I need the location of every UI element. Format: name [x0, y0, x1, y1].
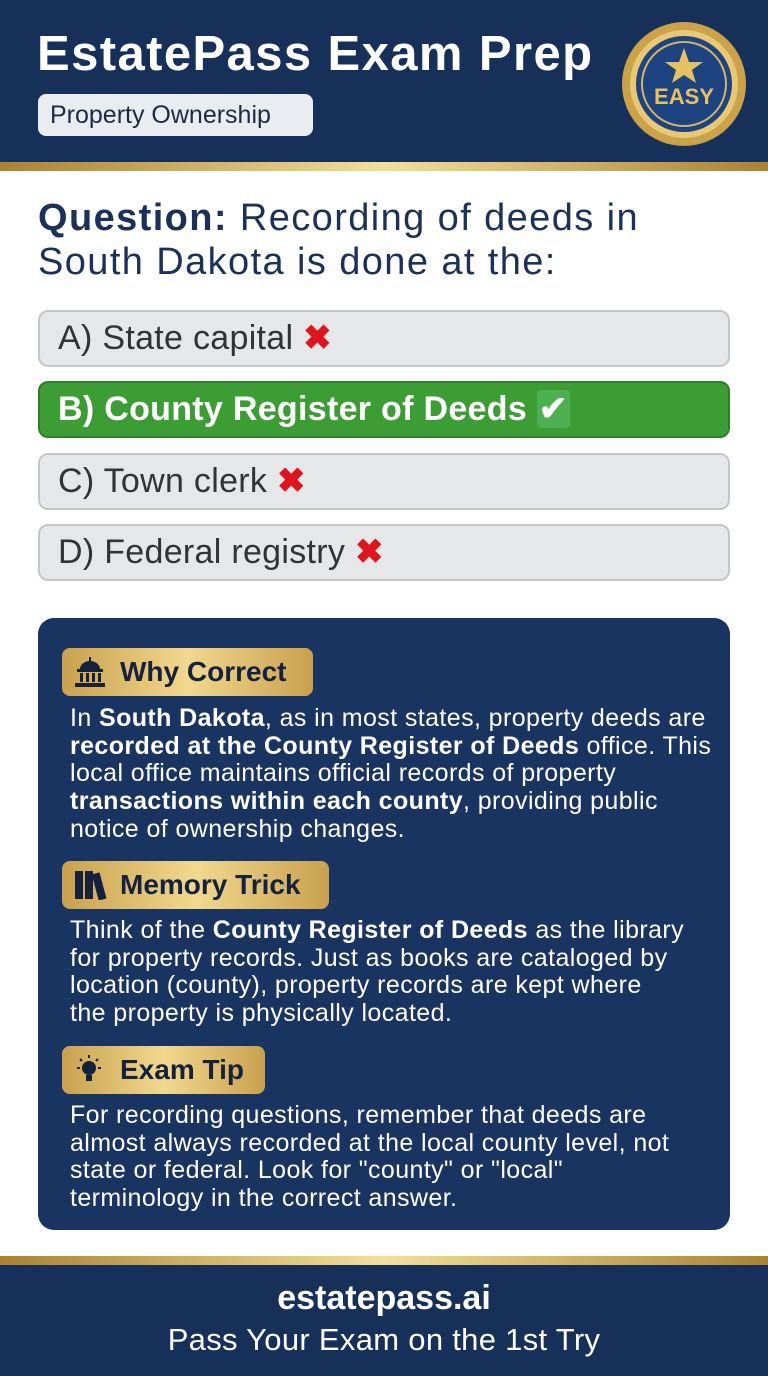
badge: easy: EASY — [654, 84, 714, 109]
badge: easy — [622, 22, 746, 146]
option C — [38, 453, 730, 510]
text: why correct: recorded at the County Register of Deeds office. This — [70, 732, 711, 760]
text: exam tip — [70, 1101, 669, 1212]
badge: memory trick — [62, 861, 329, 909]
text: why correct: In South Dakota, as in most states, property deeds are — [70, 704, 706, 732]
option D: D) Federal registry ✖ — [58, 533, 384, 571]
text: memory trick: Think of the County Register of Deeds as the library — [70, 916, 684, 944]
header — [0, 0, 768, 162]
badge: why correct — [62, 648, 313, 696]
title: EstatePass Exam Prep — [37, 27, 593, 81]
text: why correct: local office maintains official records of property — [70, 759, 616, 787]
text: memory trick — [70, 916, 684, 1027]
footer — [0, 1265, 768, 1376]
footer tagline: Pass Your Exam on the 1st Try — [168, 1322, 600, 1357]
option B correct: B) County Register of Deeds ✔ — [58, 390, 568, 428]
option A — [38, 310, 730, 367]
badge: memory trick: Memory Trick — [120, 869, 301, 900]
badge: exam tip: Exam Tip — [120, 1054, 244, 1085]
text: memory trick: for property records. Just as books are cataloged by — [70, 944, 667, 972]
question: South Dakota is done at the: — [38, 241, 557, 283]
text: exam tip: almost always recorded at the local county level, not — [70, 1129, 669, 1157]
panel: explanation — [38, 618, 730, 1230]
category tag — [38, 94, 313, 136]
question: Question: Recording of deeds in — [38, 197, 639, 239]
category tag: Property Ownership — [50, 101, 271, 129]
badge: why correct: Why Correct — [120, 656, 286, 687]
text: exam tip: terminology in the correct answer. — [70, 1184, 457, 1212]
option D — [38, 524, 730, 581]
text: exam tip: For recording questions, remember that deeds are — [70, 1101, 646, 1129]
badge: exam tip — [62, 1046, 265, 1094]
text: exam tip: state or federal. Look for "county" or "local" — [70, 1156, 563, 1184]
option A: A) State capital ✖ — [58, 319, 332, 357]
question — [38, 197, 639, 283]
footer url: estatepass.ai — [277, 1279, 491, 1317]
text: why correct: transactions within each county, providing public — [70, 787, 658, 815]
text: memory trick: location (county), property records are kept where — [70, 971, 642, 999]
text: memory trick: the property is physically located. — [70, 999, 452, 1027]
text: why correct — [70, 704, 711, 843]
text: why correct: notice of ownership changes. — [70, 815, 405, 843]
option B correct — [38, 381, 730, 438]
option C: C) Town clerk ✖ — [58, 462, 306, 500]
